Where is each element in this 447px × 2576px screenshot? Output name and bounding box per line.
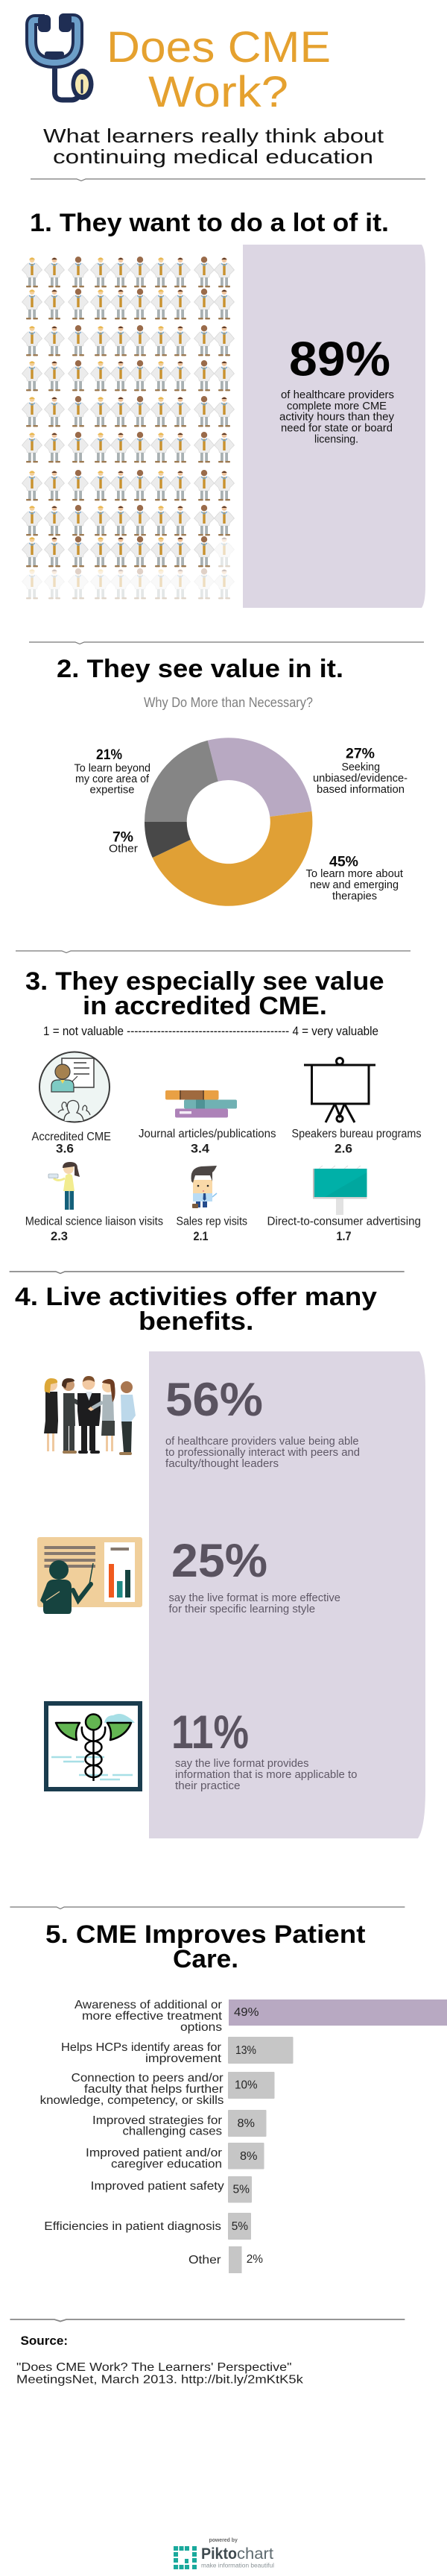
label: 45%: To learn more about — [305, 867, 404, 880]
source citation — [16, 2361, 304, 2387]
text: 56% description: faculty/thought leaders — [165, 1457, 279, 1470]
text: 89% description: of healthcare providers — [281, 389, 394, 401]
label: direct-to-consumer — [267, 1216, 421, 1243]
bar: connection 10%: 10% — [235, 2079, 258, 2091]
bar: identify areas 13% — [61, 2037, 294, 2065]
footer: Piktochart logo: Pikto — [201, 2545, 237, 2563]
bar: safety 5%: 5% — [232, 2184, 250, 2196]
donut chart — [145, 738, 312, 906]
bar: other 2%: 2% — [247, 2253, 263, 2266]
label: journal articles: 3.4 — [191, 1141, 210, 1156]
title: Work? — [148, 68, 288, 116]
text: 25% description — [168, 1592, 340, 1615]
label: 45%: therapies — [332, 890, 377, 902]
bar: other 2% — [188, 2246, 263, 2273]
text: 89% description: need for state or board — [281, 422, 393, 434]
label: speakers bureau: Speakers bureau programs — [292, 1128, 422, 1140]
label: 21%: my core area of — [75, 773, 150, 785]
bar: diagnosis 5%: Efficiencies in patient diagnosis — [44, 2220, 221, 2233]
text: 25% description: for their specific learning style — [168, 1603, 315, 1615]
icon: presentation screen — [304, 1058, 375, 1122]
footer: Piktochart logo — [174, 2536, 274, 2569]
icon: billboard — [313, 1166, 367, 1215]
text: 56% description — [165, 1435, 360, 1470]
bar: other 2%: Other — [188, 2254, 221, 2266]
bar: strategies 8%: challenging cases — [122, 2126, 222, 2137]
subtitle: continuing medical education — [53, 145, 373, 168]
label: journal articles — [139, 1128, 276, 1156]
bar: awareness 49% — [74, 1999, 447, 2034]
label: 45%: new and emerging — [310, 879, 399, 891]
heading: section 5 — [45, 1920, 365, 1973]
bar: education 8%: 8% — [240, 2150, 258, 2163]
label: 7%: Other — [109, 843, 138, 855]
label: 27%: 27% — [346, 746, 375, 762]
bar: awareness 49%: options — [180, 2021, 222, 2034]
icon: sales rep — [191, 1166, 217, 1208]
bar: diagnosis 5% — [44, 2213, 251, 2240]
text: 89% description: licensing. — [314, 434, 358, 446]
text: 11% description: information that is more applicable to — [175, 1768, 358, 1781]
text: 89% description — [279, 389, 395, 446]
label: 27% — [313, 746, 408, 796]
subtitle — [43, 125, 384, 168]
heading: section 4 — [15, 1283, 377, 1336]
label: 45%: 45% — [329, 855, 358, 870]
source heading: Source: — [21, 2334, 68, 2348]
bar: identify areas 13%: improvement — [145, 2052, 222, 2065]
panel: 89 percent callout — [243, 245, 425, 608]
bar: awareness 49%: Awareness of additional or — [74, 1999, 223, 2011]
icon: books — [165, 1090, 237, 1117]
icon: group of professionals — [44, 1376, 136, 1455]
label: medical science liaison: Medical science liaison visits — [25, 1216, 163, 1228]
text: 11% description: say the live format provides — [175, 1757, 308, 1770]
title — [107, 23, 331, 116]
label: sales rep — [176, 1216, 247, 1243]
bar: diagnosis 5%: 5% — [232, 2220, 248, 2233]
text: 89% description: activity hours than they — [279, 412, 395, 424]
heading: section 2: 2. They see value in it. — [57, 655, 343, 683]
footer: Piktochart logo: powered by — [209, 2536, 238, 2543]
subtitle: What learners really think about — [43, 125, 384, 147]
text: 11% description — [175, 1757, 358, 1792]
label: sales rep: Sales rep visits — [176, 1216, 247, 1228]
panel: live activity stats — [149, 1351, 425, 1838]
label: direct-to-consumer: 1.7 — [337, 1229, 352, 1243]
bar: connection 10%: faculty that helps further — [84, 2083, 224, 2096]
icon: accredited CME — [39, 1052, 110, 1122]
label: 27%: based information — [317, 783, 405, 796]
label: medical science liaison: 2.3 — [51, 1229, 68, 1243]
heading: section 3: in accredited CME. — [83, 992, 327, 1020]
bar: education 8%: Improved patient and/or — [86, 2146, 223, 2160]
label: 45% — [305, 855, 404, 902]
heading: section 3: 3. They especially see value — [25, 967, 384, 996]
label: accredited CME — [31, 1131, 111, 1156]
heading: section 5: Care. — [173, 1945, 238, 1973]
icon: stethoscope — [31, 13, 94, 100]
label: 21%: expertise — [89, 783, 134, 797]
heading: section 3 — [25, 967, 384, 1020]
icon array: 100 doctors, 89 highlighted — [22, 257, 234, 599]
heading: section 5: 5. CME Improves Patient — [45, 1920, 365, 1949]
label: speakers bureau: 2.6 — [335, 1141, 352, 1156]
label: 21%: To learn beyond — [74, 762, 150, 774]
label: accredited CME: 3.6 — [56, 1141, 74, 1156]
label: direct-to-consumer: Direct-to-consumer advertising — [267, 1216, 421, 1228]
heading: section 1: 1. They want to do a lot of it. — [30, 209, 389, 237]
icon: caduceus — [46, 1703, 140, 1789]
label: accredited CME: Accredited CME — [31, 1131, 111, 1143]
bar: safety 5%: Improved patient safety — [91, 2180, 224, 2193]
bar: safety 5% — [91, 2176, 252, 2203]
label: 7% — [109, 829, 138, 855]
chart title: Why Do More than Necessary? — [144, 695, 313, 710]
label: 21% — [74, 747, 150, 797]
text: 56% description: of healthcare providers value being able — [165, 1435, 359, 1448]
bar: connection 10% — [40, 2072, 274, 2107]
heading: section 4: benefits. — [139, 1307, 253, 1336]
heading: section 4: 4. Live activities offer many — [15, 1283, 377, 1311]
bar: awareness 49%: 49% — [234, 2006, 259, 2019]
label: 27%: unbiased/evidence- — [313, 772, 408, 785]
bar: awareness 49%: more effective treatment — [82, 2010, 223, 2023]
icon: presenter with chart — [37, 1537, 142, 1614]
bar: strategies 8% — [92, 2110, 267, 2137]
bar chart: patient care — [40, 1999, 447, 2273]
scale legend: 1 = not valuable ------------------------------------------- 4 = very valuable — [43, 1025, 378, 1038]
label: medical science liaison — [25, 1216, 163, 1243]
bar: strategies 8%: 8% — [237, 2117, 255, 2130]
label: speakers bureau — [292, 1128, 422, 1156]
label: 21%: 21% — [96, 747, 122, 763]
stat: 89%: 89% — [289, 331, 390, 386]
bar: connection 10%: knowledge, competency, or skills — [40, 2094, 224, 2107]
text: 25% description: say the live format is more effective — [168, 1592, 340, 1604]
bar: identify areas 13%: 13% — [235, 2044, 256, 2057]
text: 89% description: complete more CME — [287, 400, 387, 412]
stat: 11%: 11% — [171, 1706, 249, 1759]
source citation: MeetingsNet, March 2013. http://bit.ly/2mKtK5k — [16, 2373, 304, 2387]
bar: strategies 8%: Improved strategies for — [92, 2114, 223, 2127]
footer: Piktochart logo: chart — [237, 2545, 273, 2563]
label: journal articles: Journal articles/publications — [139, 1128, 276, 1140]
bar: identify areas 13%: Helps HCPs identify areas for — [61, 2041, 222, 2054]
label: 27%: Seeking — [341, 761, 380, 773]
stat: 25%: 25% — [171, 1535, 267, 1587]
text: 11% description: their practice — [175, 1779, 240, 1792]
text: 56% description: to professionally interact with peers and — [165, 1446, 360, 1459]
source citation: "Does CME Work? The Learners' Perspective" — [16, 2361, 292, 2374]
footer: Piktochart logo: make information beautiful — [201, 2563, 274, 2569]
label: sales rep: 2.1 — [194, 1229, 209, 1243]
title: Does CME — [107, 23, 331, 72]
bar: connection 10%: Connection to peers and/or — [72, 2072, 224, 2085]
label: 7%: 7% — [112, 829, 133, 846]
bar: education 8% — [86, 2143, 264, 2170]
icon: woman with device — [48, 1162, 80, 1210]
stat: 56%: 56% — [165, 1374, 263, 1426]
bar: education 8%: caregiver education — [111, 2158, 222, 2170]
